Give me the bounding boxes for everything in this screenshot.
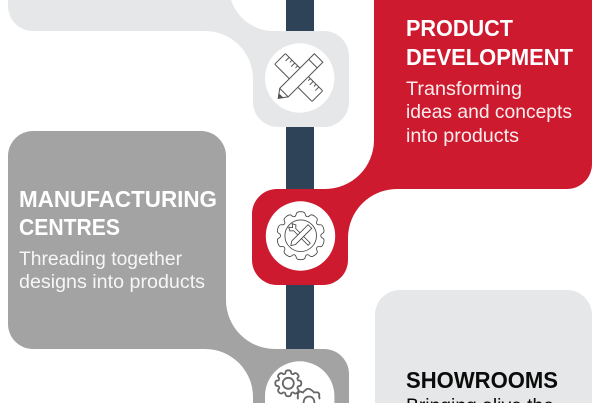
text: manufacturing centres (19, 186, 217, 293)
text: manufacturing centres: CENTRES (19, 214, 120, 240)
timeline bar (286, 0, 314, 403)
icon: gear with tools (276, 212, 325, 260)
icon: ruler and pencil (274, 54, 323, 103)
panel: product development (red) with connector node (252, 0, 592, 285)
text: manufacturing centres: MANUFACTURING (19, 186, 217, 212)
text: product development: DEVELOPMENT (406, 44, 574, 70)
text: product development: Transforming (406, 78, 522, 100)
text: manufacturing centres: designs into products (19, 271, 205, 293)
panel: top grey with connector node (8, 0, 349, 127)
text: product development: ideas and concepts (406, 101, 572, 123)
text: product development (406, 15, 574, 147)
panel: manufacturing centres with connector node (8, 131, 349, 403)
icon: gears (275, 370, 320, 403)
text: manufacturing centres: Threading together (19, 248, 182, 270)
text: product development: into products (406, 125, 519, 147)
text: product development: PRODUCT (406, 15, 514, 41)
panel: showrooms (375, 290, 592, 403)
text: showrooms: SHOWROOMS (406, 367, 558, 393)
text: showrooms (406, 367, 558, 403)
